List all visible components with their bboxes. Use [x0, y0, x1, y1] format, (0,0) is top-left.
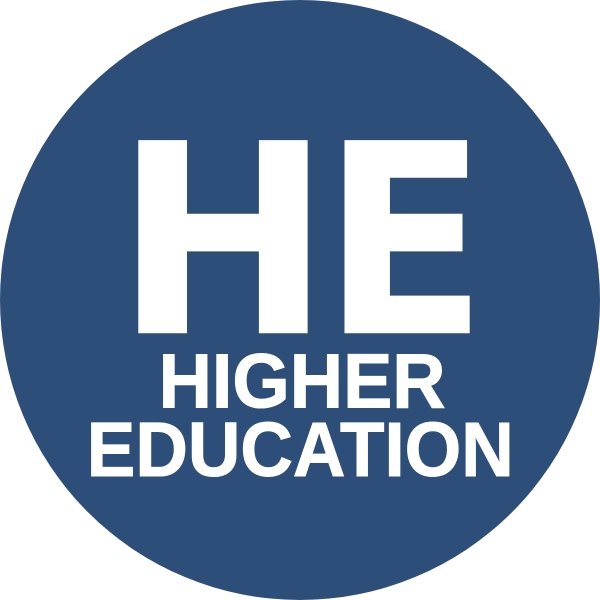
label: HIGHER: HIGHER	[159, 338, 446, 424]
label: EDUCATION: EDUCATION	[87, 407, 514, 493]
large HE heading: H	[114, 88, 331, 396]
large HE heading	[114, 88, 487, 396]
large HE heading: E	[322, 88, 487, 396]
